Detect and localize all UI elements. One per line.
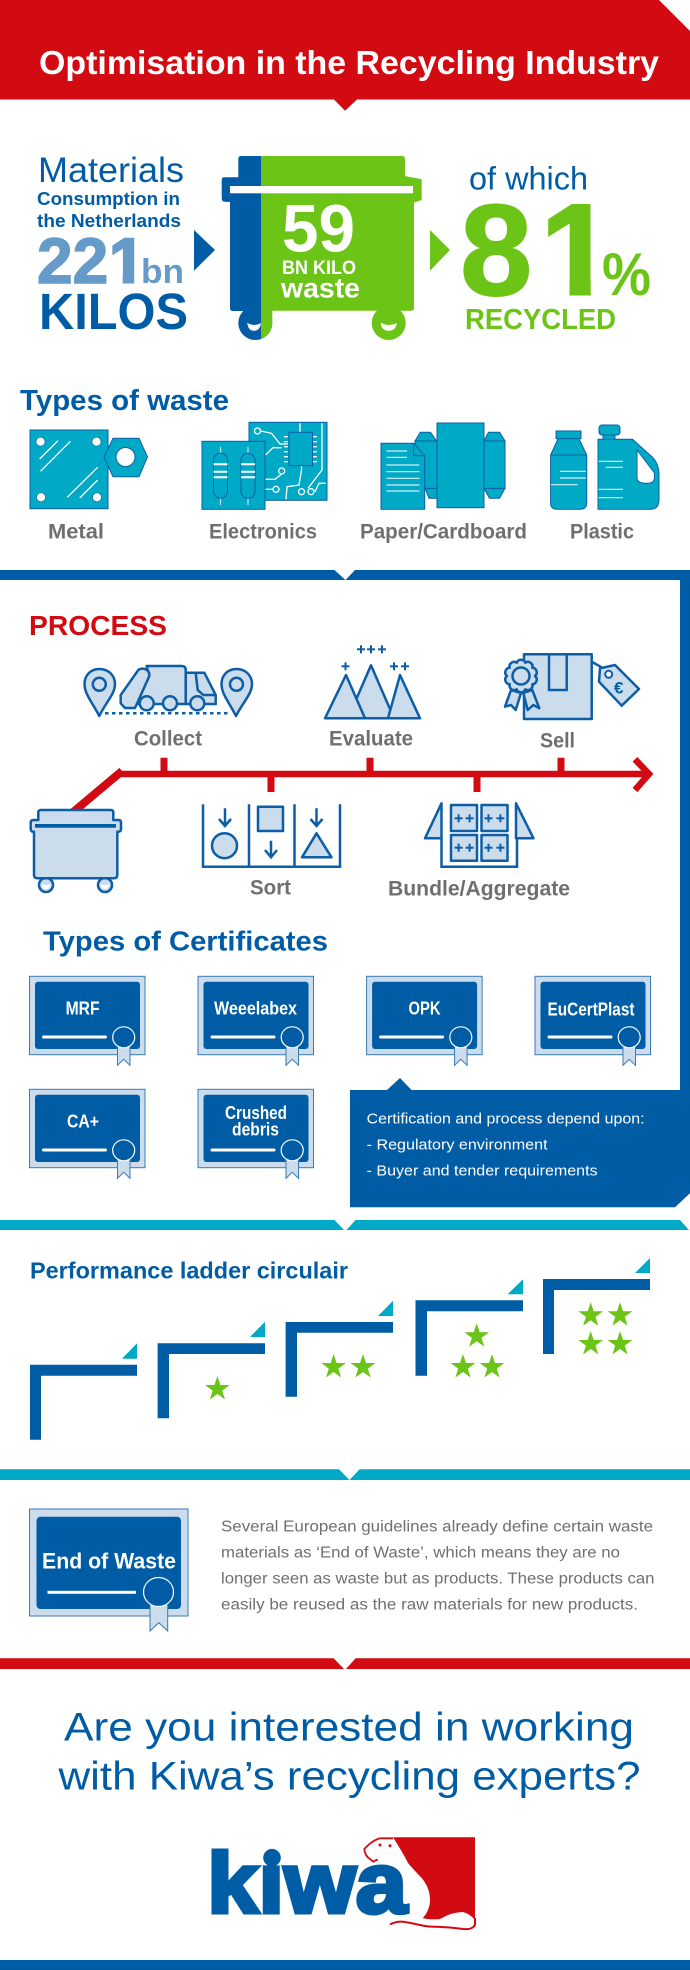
blue frame: process section — [0, 570, 690, 1090]
timeline arrow — [72, 758, 649, 813]
text: end of waste explanation: materials as ‘End of Waste’, which means they are no — [221, 1544, 620, 1561]
certificate: CA+ — [30, 1089, 145, 1178]
text: end of waste explanation: easily be reused as the raw materials for new products. — [221, 1596, 638, 1613]
icon: collect truck and pins — [84, 666, 252, 716]
stat: materials consumption: bn — [141, 253, 184, 291]
callout: certification and process: - Regulatory environment — [367, 1136, 548, 1153]
certificate: CA+: CA+ — [67, 1111, 99, 1131]
icon: plastic containers — [551, 425, 659, 509]
logo: kiwa — [207, 1836, 475, 1931]
stat: materials consumption: Materials — [38, 151, 184, 190]
stat: materials consumption — [37, 151, 188, 340]
red divider — [0, 1658, 344, 1669]
text: end of waste explanation — [221, 1518, 654, 1613]
icon: paper and cardboard — [381, 423, 505, 509]
text: end of waste explanation: Several European guidelines already define certain waste — [221, 1518, 653, 1535]
icon: sell box with rosette and tag: € — [614, 678, 624, 698]
icon: waste bin start — [31, 810, 121, 892]
teal divider — [0, 1220, 689, 1230]
heading: process: PROCESS — [29, 610, 167, 641]
callout: certification and process: - Buyer and tender requirements — [367, 1162, 598, 1179]
ladder step 5 — [543, 1258, 650, 1354]
stat: 81% recycled: % — [602, 241, 651, 308]
bottom bar — [0, 1960, 690, 1970]
ladder step 1 — [30, 1343, 137, 1440]
icon: sell box with rosette and tag — [505, 654, 639, 719]
title: Optimisation in the Recycling Industry — [39, 44, 660, 81]
stat: materials consumption: 22 — [37, 225, 108, 297]
ladder step 4 — [416, 1279, 523, 1378]
label: sell: Sell — [540, 729, 575, 752]
call to action: Are you interested in working — [64, 1706, 634, 1750]
certificate: EuCertPlast: EuCertPlast — [548, 999, 634, 1019]
heading: types of waste: Types of waste — [20, 385, 229, 417]
ladder step 3 — [286, 1301, 393, 1397]
icon: waste container with 59 bn kilo: 59 — [282, 192, 355, 267]
red divider right — [346, 1658, 690, 1669]
certificate: MRF: MRF — [66, 999, 100, 1019]
stat: 81% recycled: 1 — [541, 177, 613, 323]
certificate: end of waste: End of Waste — [42, 1548, 176, 1573]
call to action — [57, 1706, 640, 1798]
label: bundle and aggregate: Bundle/Aggregate — [388, 877, 570, 900]
icon: waste container with 59 bn kilo: BN KILO — [282, 258, 356, 279]
stat: 81% recycled: RECYCLED — [465, 304, 616, 336]
heading: performance ladder: Performance ladder circulair — [30, 1258, 348, 1284]
label: metal: Metal — [48, 520, 104, 543]
label: sort: Sort — [250, 877, 291, 900]
arrow: to waste bin — [194, 230, 215, 271]
arrow: to recycled — [430, 230, 450, 271]
label: electronics: Electronics — [209, 520, 317, 543]
stat: materials consumption: KILOS — [39, 283, 188, 340]
icon: metal — [30, 430, 148, 509]
certificate: Weeelabex — [198, 976, 314, 1065]
stat: materials consumption: 1 — [109, 225, 145, 297]
label: paper and cardboard: Paper/Cardboard — [360, 520, 527, 543]
callout: certification and process: Certification and process depend upon: — [367, 1110, 645, 1127]
icon: sort bins — [203, 804, 340, 867]
icon: waste container with 59 bn kilo: waste — [280, 272, 360, 303]
icon: electronics — [202, 422, 327, 509]
certificate: end of waste — [30, 1509, 188, 1631]
stat: 81% recycled: 8 — [460, 177, 532, 323]
callout: certification and process — [350, 1078, 690, 1207]
ladder step 2 — [158, 1322, 265, 1418]
icon: waste container with 59 bn kilo — [222, 156, 422, 340]
certificate: MRF — [30, 976, 145, 1065]
stat: 81% recycled — [460, 160, 651, 336]
certificate: OPK: OPK — [408, 999, 440, 1019]
heading: types of certificates: Types of Certificates — [43, 926, 328, 957]
certificate: Weeelabex: Weeelabex — [214, 999, 297, 1019]
label: evaluate: Evaluate — [329, 728, 413, 751]
label: collect: Collect — [134, 728, 202, 751]
label: plastic: Plastic — [570, 520, 634, 543]
certificate: Crushed debris: Crushed — [225, 1103, 287, 1123]
call to action: with Kiwa’s recycling experts? — [57, 1754, 640, 1798]
teal divider with notch — [0, 1469, 690, 1480]
text: end of waste explanation: longer seen as waste but as products. These products can — [221, 1570, 654, 1587]
certificate: OPK — [367, 976, 482, 1065]
certificate: Crushed debris: debris — [232, 1119, 279, 1139]
stat: materials consumption: the Netherlands — [37, 210, 181, 231]
icon: bundled boxes — [425, 803, 534, 867]
certificate: Crushed debris — [198, 1089, 314, 1178]
stat: materials consumption: Consumption in — [37, 188, 180, 209]
icon: evaluate mountains — [325, 645, 420, 718]
header banner — [0, 0, 690, 111]
stat: 81% recycled: of which — [469, 160, 588, 196]
certificate: EuCertPlast — [535, 976, 650, 1065]
logo: kiwa: kiwa — [207, 1836, 408, 1931]
